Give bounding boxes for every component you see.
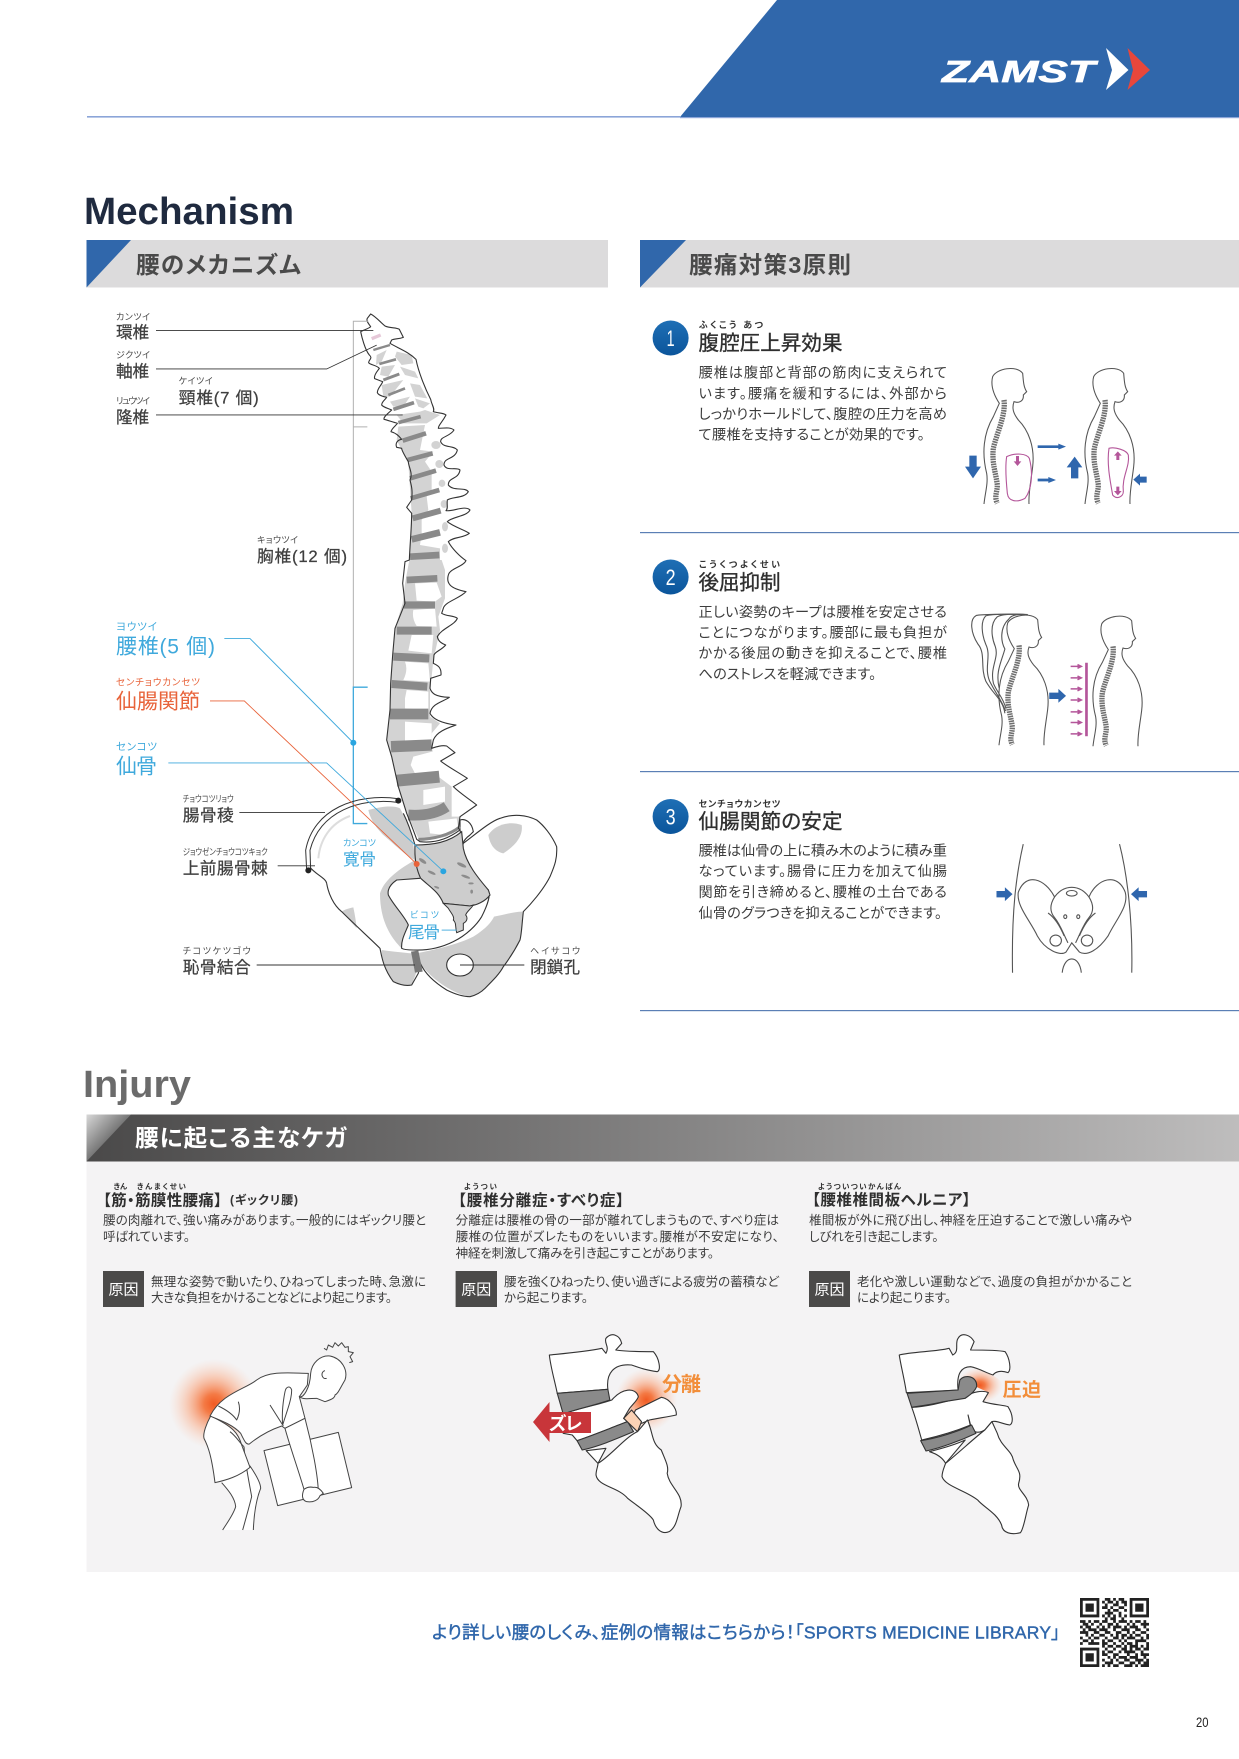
cause: 腰を強くひねったり、使い過ぎによる疲労の蓄積など — [504, 1274, 780, 1289]
label: 仙腸関節 — [116, 678, 200, 714]
orange leader: sacroiliac — [210, 701, 417, 864]
text 2: 正しい姿勢のキープは腰椎を安定させる — [698, 605, 947, 621]
heading — [458, 1181, 624, 1210]
heading: ようついついかんばん — [818, 1181, 902, 1191]
label: 上前腸骨棘 — [183, 846, 268, 878]
heading: ようつい — [464, 1181, 498, 1191]
heading — [812, 1181, 970, 1209]
label: 環椎: 環椎 — [116, 323, 149, 342]
text 1: います。腰痛を緩和するには、外部から — [698, 385, 947, 402]
label: 閉鎖孔: 閉鎖孔 — [530, 958, 580, 977]
description: 神経を刺激して痛みを引き起こすことがあります。 — [456, 1246, 714, 1260]
blue leader: lumbar — [224, 639, 353, 743]
label: 腸骨稜 — [182, 794, 234, 825]
label: 閉鎖孔: ヘイサコウ — [530, 946, 580, 956]
title 1: 腹腔圧上昇効果 — [698, 332, 842, 355]
cause: から起こります。 — [504, 1291, 588, 1305]
label: 腰椎 — [116, 621, 215, 659]
section bar: 腰痛対策3原則 — [640, 240, 1239, 288]
label: 頸椎: ケイツイ — [179, 376, 213, 386]
number badge 1: 1 — [667, 326, 675, 351]
label: 隆椎: リュウツイ — [116, 396, 150, 406]
illustration: pelvis front view — [996, 844, 1147, 973]
description: しびれを引き起こします。 — [809, 1230, 938, 1244]
label: 環椎: カンツイ — [116, 312, 150, 322]
QR code — [1080, 1599, 1149, 1666]
principle 3: 仙腸関節の安定 — [653, 799, 1147, 973]
number badge 3 — [653, 799, 689, 834]
arrow: ズレ — [533, 1402, 591, 1442]
thoracic shading — [397, 425, 440, 562]
diagram: spine — [361, 314, 477, 842]
cervical shading — [376, 350, 440, 423]
sacrum — [415, 820, 490, 906]
coccyx — [443, 903, 473, 933]
number badge 3: 3 — [666, 804, 676, 830]
heading: きん — [114, 1182, 128, 1191]
label: 上前腸骨棘: 上前腸骨棘 — [183, 859, 268, 878]
lumbar bracket — [353, 687, 368, 824]
label: 腸骨稜: 腸骨稜 — [183, 806, 234, 825]
description — [809, 1212, 1132, 1244]
label: 胸椎: キョウツイ — [257, 535, 298, 545]
cervical and thoracic bracket — [353, 321, 368, 687]
coccyx leader — [442, 929, 457, 931]
cause: 無理な姿勢で動いたり、ひねってしまった時、急激に — [151, 1274, 426, 1289]
description: 椎間板が外に飛び出し、神経を圧迫することで激しい痛みや — [809, 1212, 1132, 1228]
dots — [305, 740, 446, 874]
cause — [456, 1271, 780, 1307]
text 2: へのストレスを軽減できます。 — [698, 666, 876, 683]
description: 分離症は腰椎の骨の一部が離れてしまうもので、すべり症は — [456, 1212, 779, 1228]
iliac crest arc — [306, 798, 398, 870]
description — [103, 1212, 426, 1244]
description: 腰椎の位置がズレたものをいいます。腰椎が不安定になり、 — [456, 1229, 779, 1244]
label: 頸椎 — [179, 376, 259, 408]
blue leader: sacrum — [168, 763, 443, 871]
heading: Mechanism: Mechanism — [84, 191, 294, 233]
text 3: 関節を引き締めると、腰椎の土台である — [698, 884, 947, 901]
heading: 【腰椎分離症・すべり症】 — [458, 1191, 624, 1210]
label: 恥骨結合 — [182, 945, 251, 977]
label: 環椎 — [116, 312, 150, 342]
label: 寛骨: 寛骨 — [343, 850, 376, 869]
intervertebral discs — [373, 345, 460, 839]
text 3 — [698, 844, 947, 922]
label: 腸骨稜: チョウコツリョウ — [182, 794, 234, 804]
leader lines — [156, 330, 524, 965]
title 1 — [698, 320, 842, 355]
principle 1: 腹腔圧上昇効果 — [653, 320, 1147, 504]
number badge 2 — [653, 560, 689, 594]
label: 分離: 分離 — [662, 1373, 701, 1396]
arrow: ズレ: ズレ — [549, 1413, 582, 1434]
posture lines and arrows — [972, 614, 1088, 736]
section bar: 腰痛対策3原則: 腰痛対策3原則 — [689, 252, 851, 278]
logo: ZAMST — [941, 48, 1150, 90]
label: 尾骨: ビコツ — [410, 910, 440, 920]
label: 仙腸関節: 仙腸関節 — [116, 691, 200, 714]
injury column 3 — [809, 1181, 1132, 1534]
label: 腰椎: 腰椎(5 個) — [116, 636, 215, 659]
annotation lines and brackets — [156, 321, 524, 965]
cause: により起こります。 — [857, 1291, 951, 1305]
label: 恥骨結合: 恥骨結合 — [183, 958, 251, 977]
cause: 原因 — [108, 1282, 138, 1298]
title 3: センチョウカンセツ — [698, 799, 781, 809]
label: 隆椎 — [116, 396, 150, 427]
description: 腰の肉離れで、強い痛みがあります。一般的にはギックリ腰と — [103, 1212, 426, 1228]
spine labels — [116, 312, 580, 977]
illustration: herniated disc — [899, 1335, 1029, 1534]
divider — [640, 532, 1239, 533]
label: 閉鎖孔 — [530, 946, 580, 977]
label: 上前腸骨棘: ジョウゼンチョウコツキョク — [183, 846, 268, 857]
cause: 原因 — [461, 1282, 491, 1298]
heading: (ギックリ腰) — [230, 1193, 298, 1207]
title 3 — [698, 799, 842, 833]
label: 胸椎: 胸椎(12 個) — [257, 547, 347, 566]
title 2: こうくつよくせい — [699, 560, 780, 570]
text 2 — [698, 605, 947, 683]
label: 仙骨 — [116, 741, 157, 779]
text 1: 腰椎は腹部と背部の筋肉に支えられて — [698, 365, 947, 382]
pain glow — [169, 1359, 259, 1449]
text 1 — [698, 365, 947, 444]
heading — [103, 1182, 298, 1210]
label: 軸椎: 軸椎 — [116, 362, 149, 381]
header: blue band — [87, 0, 1239, 118]
label: 仙骨: 仙骨 — [116, 756, 157, 779]
text 1: て腰椎を支持することが効果的です。 — [698, 428, 925, 444]
text 3: 腰椎は仙骨の上に積み木のように積み重 — [698, 844, 947, 860]
label: 寛骨: カンコツ — [343, 838, 377, 848]
label: 尾骨: 尾骨 — [408, 923, 440, 942]
cause — [809, 1271, 1132, 1307]
label: 圧迫: 圧迫 — [1003, 1379, 1041, 1401]
title 2 — [698, 560, 780, 594]
label: 頸椎: 頸椎(7 個) — [179, 388, 259, 408]
heading: 【筋・筋膜性腰痛】 — [103, 1191, 222, 1210]
label: 仙骨: センコツ — [116, 741, 157, 753]
text 3: なっています。腸骨に圧力を加えて仙腸 — [698, 864, 947, 880]
divider — [640, 1010, 1239, 1011]
cause: 大きな負担をかけることなどにより起こります。 — [151, 1291, 392, 1305]
title 3: 仙腸関節の安定 — [698, 810, 842, 833]
illustration: abdominal pressure — [965, 369, 1147, 504]
text 2: ことにつながります。腰部に最も負担が — [698, 626, 947, 642]
heading: Injury: Injury — [83, 1064, 191, 1106]
label: 腰椎: ヨウツイ — [116, 621, 157, 633]
section bar: 腰に起こる主なケガ — [86, 1114, 1239, 1162]
divider — [640, 771, 1239, 772]
number badge 2: 2 — [666, 565, 676, 590]
text 2: かかる後屈の動きを抑えることで、腰椎 — [698, 646, 947, 662]
panel: injury background — [86, 1161, 1239, 1572]
illustration: extension restriction — [972, 614, 1142, 746]
label: 軸椎: ジクツイ — [116, 350, 150, 360]
description: 呼ばれています。 — [103, 1230, 190, 1244]
number badge 1 — [653, 320, 689, 356]
heading: きんまくせい — [137, 1182, 187, 1191]
section bar: 腰に起こる主なケガ: 腰に起こる主なケガ — [135, 1125, 347, 1151]
figure left with spine — [999, 615, 1048, 745]
injury column 2 — [456, 1181, 780, 1533]
section bar: 腰のメカニズム — [86, 240, 608, 288]
illustration: spondylolysis — [549, 1335, 681, 1533]
cause: 老化や激しい運動などで、過度の負担がかかること — [857, 1274, 1132, 1289]
illustration: man lifting box — [204, 1343, 353, 1530]
logo: ZAMST: ZAMST — [941, 54, 1099, 89]
title 1: ふくこう あつ — [699, 320, 763, 330]
heading: 【腰椎椎間板ヘルニア】 — [812, 1190, 970, 1209]
injury column 1 — [103, 1182, 426, 1530]
section bar: 腰のメカニズム: 腰のメカニズム — [136, 251, 301, 278]
cause — [103, 1271, 426, 1307]
label: 仙腸関節: センチョウカンセツ — [116, 678, 200, 688]
text 3: 仙骨のグラつきを抑えることができます。 — [698, 906, 942, 922]
title 2: 後屈抑制 — [698, 571, 780, 594]
label: 胸椎 — [257, 535, 347, 566]
label: 隆椎: 隆椎 — [116, 408, 149, 427]
diagram: pelvis — [307, 798, 557, 997]
cause: 原因 — [814, 1282, 844, 1298]
label: 寛骨 — [343, 838, 377, 869]
description — [456, 1212, 779, 1260]
label: 尾骨 — [408, 910, 440, 942]
lumbar shading — [387, 560, 460, 842]
principle 2: 後屈抑制 — [653, 560, 1142, 746]
label: 恥骨結合: チコツケツゴウ — [182, 945, 251, 956]
text 1: しっかりホールドして、腹腔の圧力を高め — [698, 406, 947, 423]
figure right with spine — [1093, 616, 1142, 746]
footer link text: より詳しい腰のしくみ、症例の情報はこちらから！「SPORTS MEDICINE LIBRARY」 — [432, 1622, 1060, 1642]
label: 軸椎 — [116, 350, 150, 381]
page number: 20 — [1196, 1714, 1209, 1730]
